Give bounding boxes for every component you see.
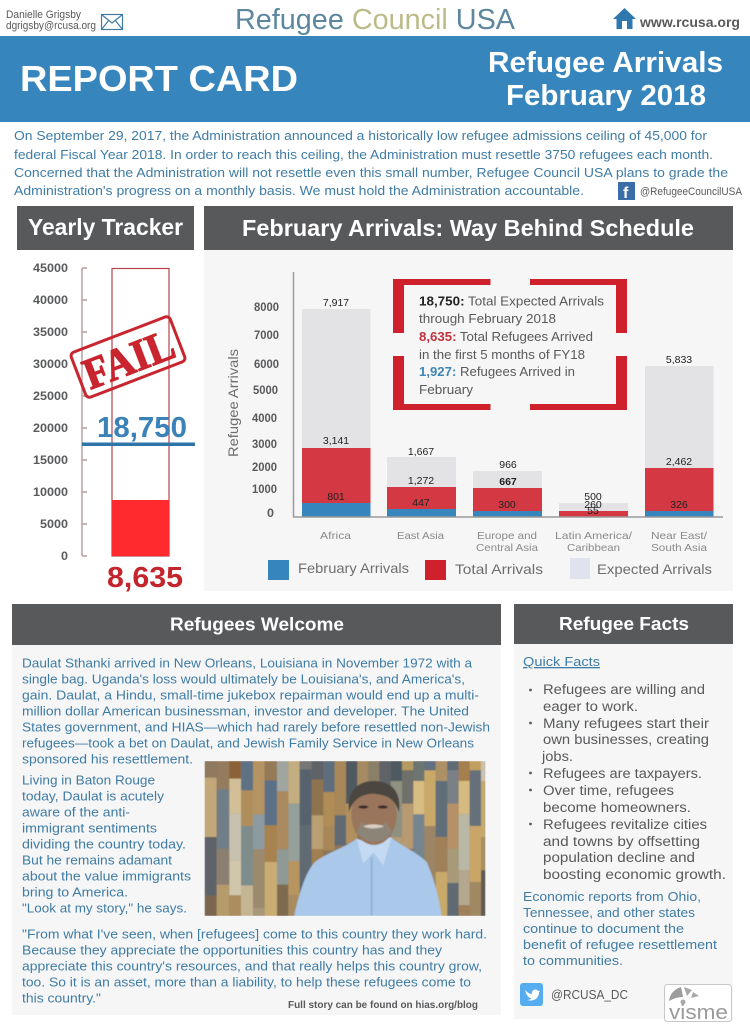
fact list: Many refugees start their <box>543 716 710 731</box>
story paragraph: refugees—took a bet on Daulat, and Jewish Family Service in New Orleans <box>22 736 475 750</box>
category labels: South Asia <box>651 542 707 554</box>
value labels: 260 <box>584 499 602 511</box>
quote: "From what I've seen, when [refugees] come to this country they work hard. <box>22 926 487 942</box>
fact list: population decline and <box>543 850 695 865</box>
bars: Near East <box>645 366 714 517</box>
second paragraph: about the value immigrants <box>22 868 192 884</box>
economic reports text: continue to document the <box>523 921 684 936</box>
fact list: Refugees are taxpayers. <box>543 766 702 781</box>
second paragraph: today, Daulat is acutely <box>22 788 165 804</box>
header contact <box>6 9 96 32</box>
category labels: East Asia <box>397 530 444 542</box>
axis <box>82 268 87 556</box>
axis labels: 20000 <box>33 421 68 435</box>
legend: Total Arrivals <box>455 561 543 577</box>
callout text: 1,927: Refugees Arrived in <box>419 364 575 379</box>
photo: Daulat Sthanki <box>204 761 486 916</box>
bars: Latin America <box>559 503 628 517</box>
y axis labels: 1000 <box>252 482 277 496</box>
quote: appreciate this country's resources, and that really helps this country grow, <box>22 958 482 974</box>
fact list: eager to work. <box>543 699 638 714</box>
logo: visme <box>664 984 732 1024</box>
logo: Refugee Council USA: Refugee Council USA <box>235 4 516 36</box>
category labels: Latin America/ <box>555 530 632 542</box>
axis labels: 25000 <box>33 389 68 403</box>
legend <box>268 558 712 580</box>
bars: Africa <box>302 309 370 517</box>
axes <box>293 272 723 517</box>
fact list: and towns by offsetting <box>543 834 700 849</box>
heading: Refugees Welcome <box>170 614 344 634</box>
story paragraph: single bag. Uganda's loss would ultimately be Louisiana's, and America's, <box>22 672 465 686</box>
logo: visme: visme <box>669 1002 728 1024</box>
quick facts link: Quick Facts <box>523 654 601 669</box>
icon: envelope <box>102 14 122 30</box>
axis labels: 15000 <box>33 453 68 467</box>
bar outline <box>112 268 169 556</box>
quote <box>22 926 487 1006</box>
stamp: fail: FAIL <box>76 320 182 399</box>
axis labels: 35000 <box>33 325 68 339</box>
heading: yearly tracker <box>17 206 194 250</box>
story paragraph: States government, and HIAS—which had rarely before resettled non-Jewish <box>22 720 490 734</box>
subtitle <box>488 47 723 112</box>
legend: Expected Arrivals <box>597 561 712 577</box>
source note: Full story can be found on hias.org/blog <box>288 999 478 1011</box>
value labels <box>323 297 692 517</box>
legend: February Arrivals <box>298 560 409 576</box>
heading: Refugee Facts <box>559 613 689 634</box>
category labels: Africa <box>320 530 351 542</box>
economic reports text: Tennessee, and other states <box>523 905 696 920</box>
fact list: Refugees revitalize cities <box>543 817 707 832</box>
axis labels: 30000 <box>33 357 68 371</box>
value labels: 55 <box>587 505 599 517</box>
y axis labels: 5000 <box>253 383 278 397</box>
axis labels: 40000 <box>33 293 68 307</box>
value: expected: 18,750 <box>97 412 187 444</box>
callout <box>393 279 627 410</box>
category labels: Near East/ <box>651 530 707 542</box>
intro text: Administration's progress on a monthly basis. We must hold the Administration accountable. <box>14 183 584 198</box>
value labels: 2,462 <box>666 456 692 468</box>
thermometer chart <box>33 261 195 594</box>
story paragraph: sponsored his resettlement. <box>22 752 193 766</box>
economic reports text: benefit of refugee resettlement <box>523 937 717 952</box>
bar fill <box>112 500 169 556</box>
second paragraph: dividing the country today. <box>22 836 186 852</box>
story paragraph: Daulat Sthanki arrived in New Orleans, Louisiana in November 1972 with a <box>22 656 473 670</box>
subtitle: February 2018 <box>506 80 706 112</box>
value labels: 300 <box>498 499 516 511</box>
quote: too. So it is an asset, more than a liability, to help these refugees come to <box>22 974 471 990</box>
second paragraph: immigrant sentiments <box>22 820 158 836</box>
story paragraph: million dollar American businessman, investor and developer. The United <box>22 704 469 718</box>
fact list: Over time, refugees <box>543 783 674 798</box>
callout text: through February 2018 <box>419 311 556 326</box>
y axis labels: 8000 <box>254 300 279 314</box>
story paragraph <box>22 656 490 766</box>
axis labels: 5000 <box>40 517 68 531</box>
value labels: 447 <box>412 497 430 509</box>
heading: yearly tracker: Yearly Tracker <box>28 214 183 240</box>
value labels: 7,917 <box>323 297 349 309</box>
facebook handle: @RefugeeCouncilUSA <box>640 186 743 198</box>
header contact: dgrigsby@rcusa.org <box>6 20 96 32</box>
bars: Europe and Central Asia <box>473 471 542 517</box>
value labels: 801 <box>327 491 345 503</box>
icon: facebook: f <box>623 185 629 202</box>
value labels: 667 <box>499 476 517 488</box>
second paragraph: aware of the anti- <box>22 804 130 820</box>
icon: house <box>613 8 636 29</box>
category labels: Europe and <box>477 530 537 542</box>
axis labels: 0 <box>61 549 68 563</box>
value labels: 5,833 <box>666 354 692 366</box>
value labels: 500 <box>584 491 602 503</box>
economic reports text: to communities. <box>523 953 623 968</box>
category labels <box>320 530 707 554</box>
category labels: Central Asia <box>476 542 538 554</box>
heading <box>514 604 733 644</box>
second paragraph: bring to America. <box>22 884 128 900</box>
twitter handle: @RCUSA_DC <box>551 987 628 1002</box>
intro text: federal Fiscal Year 2018. In order to reach this ceiling, the Administration must resettle 3750 refugees each month. <box>14 147 713 162</box>
banner <box>0 36 750 122</box>
heading <box>12 604 501 645</box>
y axis title: Refugee Arrivals <box>225 349 241 457</box>
y axis labels: 6000 <box>254 357 279 371</box>
value labels: 966 <box>499 459 517 471</box>
panel: refugee facts <box>514 604 733 1024</box>
y axis labels <box>252 300 279 520</box>
fact list <box>529 682 726 882</box>
expected marker <box>82 442 195 446</box>
callout text: in the first 5 months of FY18 <box>419 347 585 362</box>
intro text: On September 29, 2017, the Administration announced a historically low refugee admissions ceiling of 45,000 for <box>14 128 708 143</box>
heading: february arrivals <box>204 206 733 250</box>
intro text <box>14 128 728 198</box>
icon: twitter <box>520 983 543 1006</box>
intro text: Concerned that the Administration will not resettle even this small number, Refugee Council USA plans to grade the <box>14 165 728 180</box>
icon: facebook <box>618 182 635 202</box>
axis labels: 45000 <box>33 261 68 275</box>
value labels: 3,141 <box>323 435 349 447</box>
quote: Because they appreciate the opportunities this country has and they <box>22 942 443 958</box>
economic reports text: Economic reports from Ohio, <box>523 889 701 904</box>
axis labels: 10000 <box>33 485 68 499</box>
bars: East Asia <box>387 457 456 517</box>
website: www.rcusa.org <box>639 14 740 30</box>
callout brackets <box>393 279 627 410</box>
fact list: become homeowners. <box>543 800 691 815</box>
second paragraph: But he remains adamant <box>22 852 172 868</box>
y axis labels: 3000 <box>252 437 277 451</box>
panel: stacked bar chart <box>204 250 733 591</box>
title: report card: REPORT CARD <box>20 58 298 99</box>
axis labels <box>33 261 68 563</box>
y axis labels: 2000 <box>252 460 277 474</box>
callout text: 18,750: Total Expected Arrivals <box>419 294 605 308</box>
category labels: Caribbean <box>567 542 620 554</box>
callout text: 8,635: Total Refugees Arrived <box>419 329 593 344</box>
heading: february arrivals: February Arrivals: Way Behind Schedule <box>242 215 694 241</box>
fact list: jobs. <box>541 749 573 764</box>
fact list: own businesses, creating <box>543 732 709 747</box>
panel: refugees welcome <box>12 604 501 1015</box>
quote: this country." <box>22 990 101 1006</box>
fact list: boosting economic growth. <box>543 867 726 882</box>
header contact: Danielle Grigsby <box>6 9 81 21</box>
callout text <box>419 294 605 397</box>
y axis labels: 7000 <box>254 328 279 342</box>
subtitle: Refugee Arrivals <box>488 47 723 79</box>
value labels: 1,667 <box>408 446 434 458</box>
economic reports text <box>523 889 717 968</box>
value labels: 326 <box>670 499 688 511</box>
second paragraph <box>22 772 192 916</box>
value: actual: 8,635 <box>107 562 183 594</box>
story paragraph: gain. Daulat, a Hindu, small-time jukebox repairman would end up a multi- <box>22 688 479 702</box>
callout text: February <box>419 382 474 397</box>
y axis labels: 0 <box>267 506 274 520</box>
value labels: 1,272 <box>408 475 434 487</box>
y axis labels: 4000 <box>252 411 277 425</box>
fact list: Refugees are willing and <box>543 682 705 697</box>
second paragraph: "Look at my story," he says. <box>22 900 187 916</box>
second paragraph: Living in Baton Rouge <box>22 772 155 788</box>
